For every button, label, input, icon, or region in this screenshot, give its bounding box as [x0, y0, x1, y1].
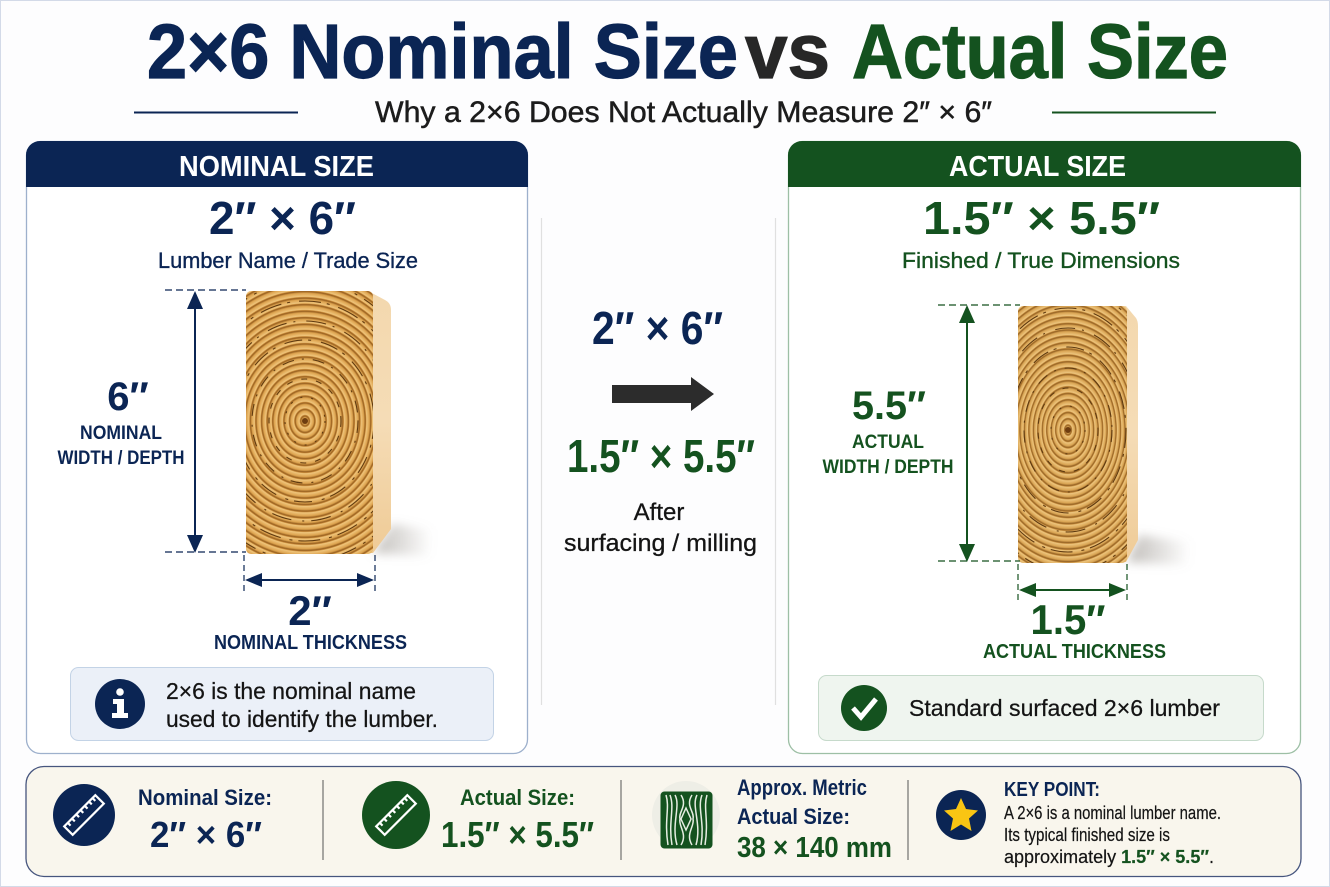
height label: actual: WIDTH / DEPTH [822, 457, 954, 478]
icon: star [936, 790, 986, 840]
summary: metric size: Actual Size: [737, 804, 850, 829]
conversion: nominal to actual: surfacing / milling [564, 530, 757, 557]
panel: nominal size [26, 141, 528, 754]
nominal header [26, 141, 528, 187]
icon: ruler navy [53, 784, 115, 846]
summary: actual size: 1.5″ × 5.5″ [441, 814, 594, 855]
callout: nominal note [70, 668, 494, 740]
thickness label: nominal [214, 587, 407, 654]
subtitle: Why a 2×6 Does Not Actually Measure 2″ × 6″ [375, 96, 992, 129]
nominal value: 2″ × 6″ [209, 192, 356, 244]
height label: actual [822, 384, 954, 478]
height label: actual: ACTUAL [852, 432, 924, 453]
actual caption: Finished / True Dimensions [902, 248, 1180, 273]
lumber end grain: actual [1018, 306, 1182, 568]
icon: ruler green [362, 781, 430, 849]
summary: key point: Its typical finished size is [1004, 825, 1170, 845]
summary: nominal size [53, 784, 272, 855]
arrow [612, 377, 714, 411]
height label: nominal: WIDTH / DEPTH [58, 448, 184, 469]
conversion: nominal to actual: 1.5″ × 5.5″ [567, 430, 755, 482]
nominal header: NOMINAL SIZE [179, 151, 374, 183]
actual value: 1.5″ × 5.5″ [923, 192, 1160, 244]
height label: nominal [58, 375, 184, 469]
callout: nominal note: 2×6 is the nominal name [166, 678, 416, 704]
conversion: nominal to actual: After [634, 499, 684, 526]
height dimension: actual [938, 305, 1020, 562]
center dividers [542, 218, 776, 705]
thickness label: actual: ACTUAL THICKNESS [983, 641, 1166, 663]
summary: actual size [362, 781, 594, 855]
width dimension: actual [1018, 564, 1127, 603]
lumber end grain: nominal [246, 291, 424, 558]
width dimension: nominal [244, 555, 375, 592]
icon: wood grain [652, 781, 720, 849]
icon: info [95, 679, 145, 729]
title: Actual Size [852, 9, 1228, 95]
summary band [26, 766, 1301, 876]
height label: nominal: NOMINAL [80, 423, 162, 444]
callout: nominal note: used to identify the lumber. [166, 706, 438, 732]
icon: check [841, 685, 887, 731]
height dimension: nominal [165, 290, 246, 553]
summary: key point [936, 779, 1221, 867]
title: 2×6 Nominal Size [147, 9, 738, 95]
summary: actual size: Actual Size: [460, 785, 575, 810]
summary: key point: A 2×6 is a nominal lumber name. [1004, 803, 1221, 823]
summary: nominal size: 2″ × 6″ [150, 814, 262, 855]
conversion: nominal to actual: 2″ × 6″ [592, 302, 723, 354]
thickness label: nominal: 2″ [288, 587, 332, 634]
height label: nominal: 6″ [107, 375, 149, 419]
callout: actual note [818, 676, 1264, 740]
title: vs [745, 9, 830, 95]
actual header: ACTUAL SIZE [949, 151, 1126, 183]
callout: actual note: Standard surfaced 2×6 lumber [909, 695, 1220, 721]
nominal caption: Lumber Name / Trade Size [158, 248, 418, 273]
summary: key point: approximately 1.5″ × 5.5″. [1004, 847, 1214, 867]
thickness label: actual: 1.5″ [1030, 596, 1106, 643]
thickness label: nominal: NOMINAL THICKNESS [214, 632, 407, 654]
summary: metric size: Approx. Metric [737, 775, 867, 800]
height label: actual: 5.5″ [852, 384, 926, 428]
conversion: nominal to actual [564, 302, 757, 557]
panel: actual size [788, 141, 1301, 754]
summary: key point: KEY POINT: [1004, 779, 1100, 801]
summary: nominal size: Nominal Size: [138, 785, 272, 810]
summary: metric size [652, 775, 892, 864]
thickness label: actual [983, 596, 1166, 663]
summary: metric size: 38 × 140 mm [737, 832, 892, 864]
actual header [788, 141, 1301, 187]
